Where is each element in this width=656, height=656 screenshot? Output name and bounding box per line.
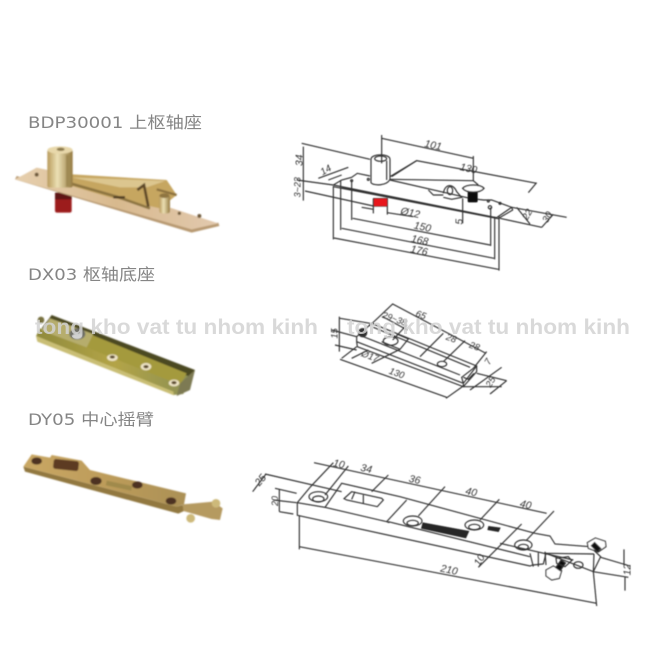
slot: [344, 492, 383, 507]
diagram: DY05 technical drawing: [253, 458, 634, 606]
arm outline: [297, 483, 601, 572]
tall spindle: [47, 146, 73, 188]
arm end: [183, 502, 223, 520]
slot: [53, 459, 79, 471]
dimension labels: 150: [413, 221, 432, 235]
black cap: [463, 185, 484, 202]
arm top: [23, 454, 186, 507]
bolts: [546, 538, 606, 580]
tall spindle: [371, 155, 390, 185]
dimension lines: [382, 135, 473, 181]
channel outline: [357, 323, 477, 387]
holes: [107, 354, 179, 386]
dimension labels: 22: [520, 207, 536, 223]
diagram: BDP30001 technical drawing: [293, 135, 567, 271]
plate front side: [15, 176, 219, 233]
dimension labels: [329, 308, 498, 390]
dimension labels: 130: [388, 366, 406, 381]
dimension labels: 30: [540, 209, 556, 225]
dimension labels: 15: [329, 327, 339, 339]
dimension labels: Ø17: [359, 348, 381, 364]
diagram: DX03 technical drawing: [329, 304, 507, 398]
dimension labels: 14: [319, 163, 333, 178]
logo plate: [421, 522, 501, 538]
holes: [31, 457, 176, 505]
dimension labels: 36: [408, 474, 421, 487]
dimension labels: 28: [444, 331, 459, 345]
lever arm: [390, 161, 478, 185]
dimension lines: [253, 474, 342, 493]
dimension labels: 210: [438, 563, 459, 578]
small spindle: [159, 193, 170, 213]
dimension labels: 7: [482, 356, 494, 366]
dimension labels: 29~38: [380, 309, 408, 328]
dimension lines: [332, 317, 370, 352]
channel side: [36, 328, 193, 395]
heading: BDP30001: BDP30001 上枢轴座: [28, 113, 202, 132]
square nut: [42, 318, 93, 347]
dimension labels: 130: [459, 162, 478, 177]
photo: top pivot BDP30001: [15, 146, 219, 233]
dimension labels: [253, 458, 634, 578]
dimension labels: 25: [253, 473, 269, 489]
dimension labels: 12: [623, 564, 634, 575]
dimension labels: 34: [295, 154, 306, 166]
dimension labels: 20: [270, 496, 280, 507]
dimension labels: Ø12: [398, 206, 421, 221]
photo: centre rocker arm DY05: [23, 454, 223, 523]
heading: DY05: DY05 中心摇臂: [28, 410, 154, 429]
set screws: [186, 499, 220, 523]
dimension labels: 5: [455, 219, 466, 225]
watermark: left: tong kho vat tu nhom kinh: [35, 316, 318, 339]
channel inside: [42, 315, 195, 377]
dimension labels: 25: [483, 374, 498, 390]
dimension labels: 3~23: [293, 177, 303, 197]
watermark: right: tong kho vat tu nhom kinh: [347, 316, 630, 339]
dimension labels: 40: [464, 486, 478, 499]
dimension labels: 28: [467, 339, 482, 353]
heading: DX03: DX03 枢轴底座: [28, 265, 155, 284]
photo: pivot base DX03: [36, 315, 195, 396]
dimension labels: 168: [410, 234, 429, 248]
lower red stud: [55, 193, 72, 213]
dimension labels: [293, 139, 556, 259]
dimension labels: 65: [414, 308, 428, 322]
dimension labels: 10: [472, 552, 488, 568]
plate: [15, 168, 218, 229]
arm side: [23, 467, 184, 514]
dimension labels: 176: [409, 244, 429, 259]
holes: [309, 492, 328, 502]
dimension labels: 101: [423, 139, 443, 153]
arm: [67, 174, 177, 208]
dimension labels: 40: [519, 499, 532, 512]
dimension labels: 10: [332, 458, 346, 471]
dimension labels: 34: [359, 463, 373, 476]
plate outline: [333, 173, 513, 219]
red stud: [374, 198, 387, 206]
